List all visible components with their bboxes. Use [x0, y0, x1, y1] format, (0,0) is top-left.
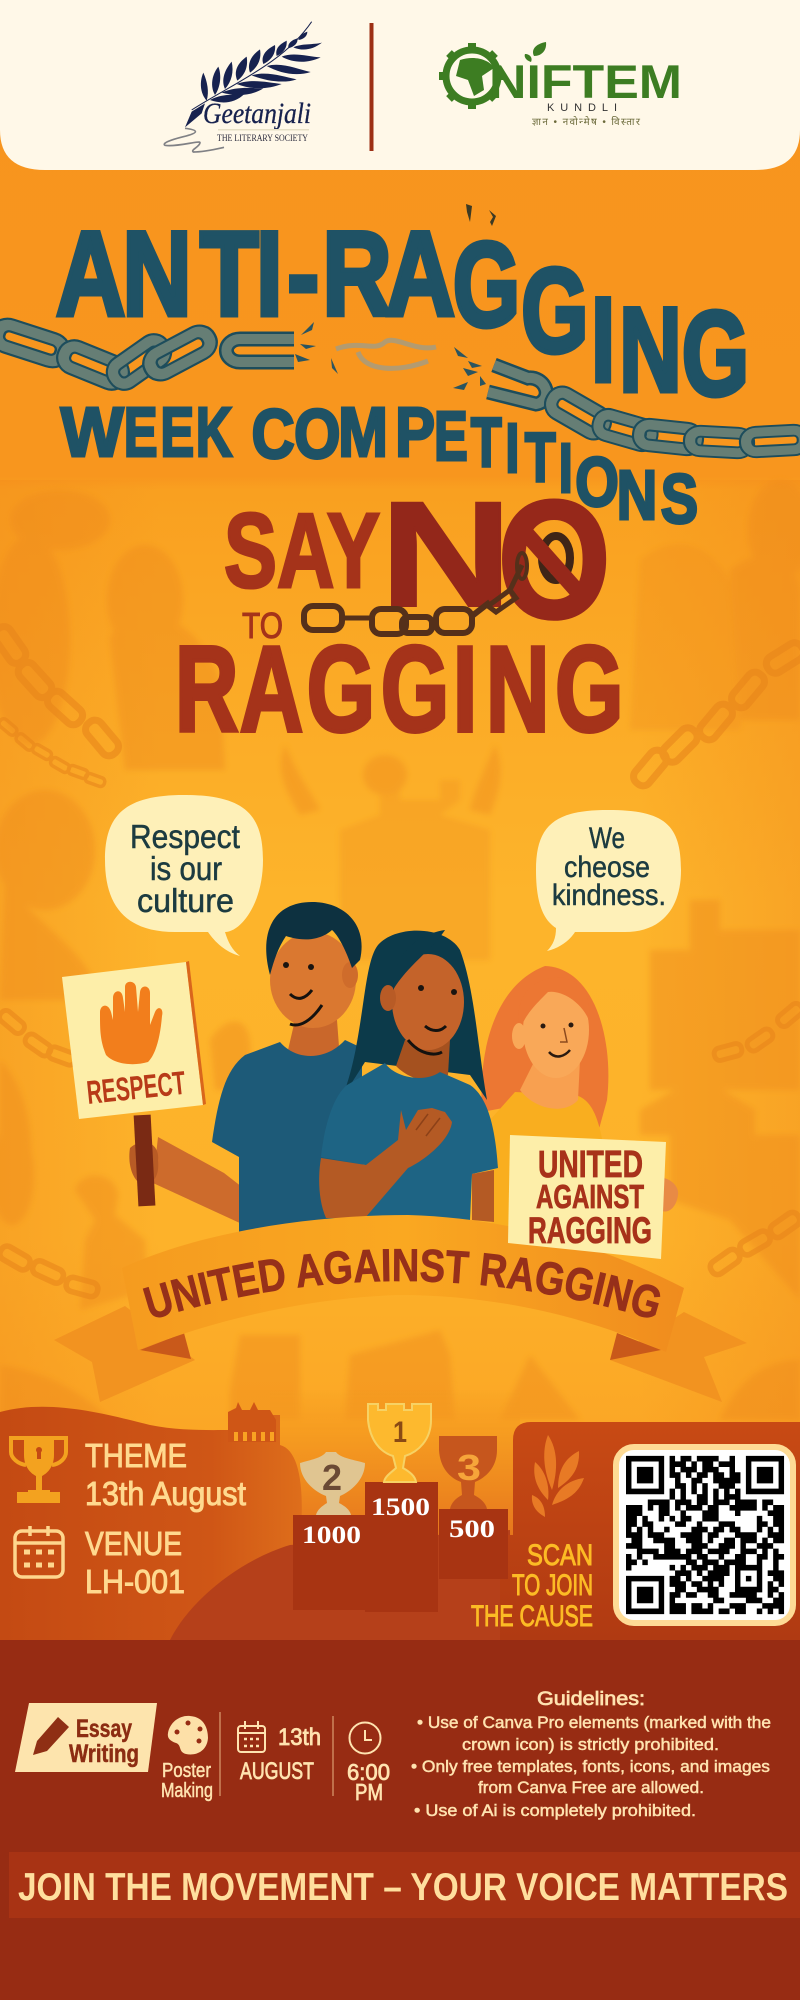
date text: AUGUST	[240, 1758, 314, 1785]
band baseline	[150, 1281, 668, 1324]
bubble text: Respect	[130, 818, 240, 855]
QR code	[616, 1447, 793, 1623]
scan text	[471, 1539, 593, 1633]
card text	[69, 1715, 139, 1768]
prize amounts: 1000	[302, 1522, 361, 1549]
guidelines: • Use of Ai is completely prohibited.	[414, 1801, 696, 1820]
icon: calendar	[15, 1526, 63, 1577]
person: girl	[481, 966, 608, 1240]
theme and venue text: VENUE	[85, 1525, 182, 1562]
theme and venue text: LH-001	[85, 1563, 185, 1600]
bubble text: culture	[137, 882, 234, 919]
trophy: second place	[300, 1452, 365, 1515]
icon: leaves	[525, 42, 546, 62]
subtitle COMP: COMP	[252, 392, 435, 473]
castle windows	[234, 1432, 274, 1441]
RAGGING: RAGGING	[175, 621, 623, 757]
icon: gear and globe	[439, 43, 505, 109]
theme and venue text: THEME	[85, 1437, 187, 1474]
scan text: SCAN	[527, 1539, 593, 1572]
logo wordmark: Geetanjali	[203, 97, 311, 130]
N of NO: N	[380, 472, 512, 638]
arm	[153, 1137, 242, 1224]
guidelines: from Canva Free are allowed.	[478, 1778, 704, 1797]
podium	[293, 1482, 508, 1612]
hair	[266, 902, 362, 975]
background silhouettes	[0, 480, 800, 1420]
subtitle: WEEK COMPETITIONS	[61, 392, 698, 538]
icon: small calendar	[238, 1721, 265, 1752]
sign: united	[508, 1135, 678, 1259]
icon: palette	[168, 1716, 208, 1754]
title part one: ANTI-RA	[56, 208, 455, 342]
guidelines: • Only free templates, fonts, icons, and images	[411, 1757, 770, 1776]
trophy: first place: 1	[393, 1416, 407, 1449]
scan text: TO JOIN	[512, 1569, 593, 1602]
head	[270, 932, 356, 1028]
lower band: left wave	[0, 1407, 302, 1640]
lower band: crowd shadow	[170, 1530, 510, 1640]
hair back	[342, 931, 487, 1100]
SAY: SAY	[224, 492, 380, 610]
shirt	[212, 1040, 362, 1232]
bubble text: kindness.	[552, 879, 666, 912]
inner dark ring	[542, 536, 570, 580]
bubble text: We	[589, 822, 625, 855]
hand	[650, 1178, 678, 1212]
logo: NIFTEM	[439, 42, 682, 128]
bubble text	[130, 818, 240, 919]
birds	[466, 204, 496, 226]
person: woman	[319, 930, 498, 1222]
lower band: middle	[270, 1390, 520, 1640]
board text	[528, 1144, 652, 1251]
time text: 6:00	[347, 1759, 390, 1785]
logo tagline: THE LITERARY SOCIETY	[217, 133, 308, 143]
KUNDLI label: KUNDLI	[547, 102, 617, 114]
icon: feather	[164, 22, 322, 152]
shirt	[321, 1063, 498, 1220]
board text: RAGGING	[528, 1210, 652, 1251]
headline: SAY NO TO RAGGING	[175, 464, 623, 757]
guidelines: Guidelines:	[537, 1689, 645, 1710]
ribbon band	[122, 1215, 684, 1352]
icon: clock	[350, 1722, 380, 1754]
call to action banner	[9, 1852, 800, 1918]
board text: UNITED	[538, 1144, 643, 1186]
prize amounts: 500	[449, 1516, 495, 1543]
date text	[240, 1724, 321, 1785]
header divider	[370, 23, 374, 151]
subtitle ETITI: ETITI	[434, 397, 573, 507]
prohibition slash	[516, 522, 578, 592]
prize amounts	[302, 1494, 495, 1549]
date text: 13th	[278, 1724, 321, 1751]
card text: Writing	[69, 1740, 139, 1768]
icon: trophy	[11, 1436, 66, 1503]
chain shards	[295, 322, 486, 390]
header panel	[0, 0, 800, 170]
poster making label: Poster	[162, 1760, 211, 1782]
QR panel	[500, 1422, 800, 1640]
trophy: second place: 2	[322, 1457, 342, 1498]
guidelines	[411, 1689, 771, 1820]
logo: Geetanjali	[164, 22, 322, 152]
subtitle EEK: EEK	[124, 393, 232, 471]
bubble text: is our	[150, 850, 222, 887]
ribbon folds	[140, 1333, 661, 1360]
O of NO: O	[497, 464, 611, 654]
face	[392, 954, 464, 1050]
time text: PM	[355, 1779, 383, 1805]
sign pole	[134, 1115, 155, 1206]
castle silhouette	[228, 1402, 276, 1442]
board text: AGAINST	[536, 1178, 644, 1215]
poster making label: Making	[161, 1780, 213, 1802]
sign: respect	[62, 961, 206, 1206]
poster making label	[161, 1760, 213, 1802]
guidelines: crown icon) is strictly prohibited.	[462, 1735, 719, 1754]
sign text: RESPECT	[85, 1064, 187, 1111]
wordmark rule	[218, 129, 309, 130]
trophy: third place: 3	[457, 1447, 481, 1488]
icon: pencil	[33, 1717, 69, 1755]
subtitle W: W	[61, 393, 124, 471]
faint chains	[0, 623, 800, 1298]
worn chain trace	[336, 340, 436, 368]
person: man	[153, 902, 362, 1232]
ribbon tails	[54, 1306, 747, 1402]
trophy: third place	[439, 1436, 497, 1509]
title: ANTI-RAGGING	[56, 208, 749, 421]
speech bubble: respect	[105, 795, 263, 956]
ribbon text: UNITED AGAINST RAGGING	[142, 1248, 660, 1318]
board	[508, 1135, 666, 1259]
icon: raised hand	[100, 982, 162, 1064]
title part two: GGING	[453, 218, 749, 421]
bubble text	[552, 822, 666, 912]
subtitle ONS: ONS	[575, 444, 698, 538]
scan text: THE CAUSE	[471, 1600, 593, 1633]
theme and venue text	[85, 1437, 246, 1600]
sign board	[62, 962, 203, 1119]
essay writing card	[15, 1703, 157, 1772]
trophy: first place	[368, 1404, 431, 1482]
guidelines: • Use of Canva Pro elements (marked with the	[417, 1713, 771, 1732]
ribbon banner	[54, 1197, 746, 1442]
TO: TO	[242, 605, 283, 646]
card text: Essay	[76, 1715, 132, 1743]
icon: laurel plant	[532, 1435, 584, 1517]
theme and venue text: 13th August	[85, 1475, 246, 1512]
man's hand	[129, 1142, 158, 1185]
NIFTEM wordmark: NIFTEM	[489, 55, 682, 108]
footer panel	[0, 1640, 800, 2000]
Hindi tagline: ज्ञान • नवोन्मेष • विस्तार	[532, 116, 641, 128]
broken chain right	[488, 365, 800, 453]
speech bubble: kindness	[536, 810, 681, 951]
bubble text: cheose	[564, 851, 650, 884]
broken chain left	[0, 322, 294, 388]
chain under NO	[304, 553, 527, 634]
prize amounts: 1500	[371, 1494, 430, 1521]
arm and hand	[319, 1108, 452, 1218]
time text	[347, 1759, 390, 1805]
